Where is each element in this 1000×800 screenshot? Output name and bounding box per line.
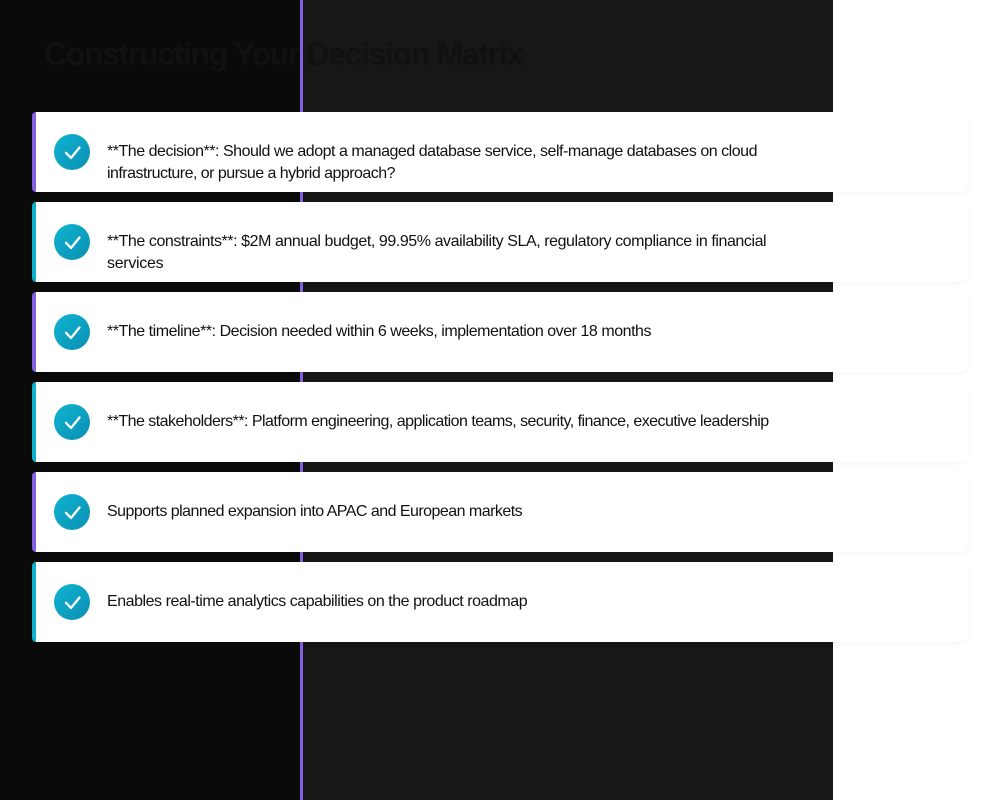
text: the timeline: **The timeline**: Decision needed within 6 weeks, implementation over 18 months (107, 323, 651, 340)
icon: check (54, 224, 90, 260)
list card: expansion (32, 472, 968, 552)
title: Constructing Your Decision Matrix (44, 36, 523, 72)
background: right dark panel (303, 0, 833, 800)
list card: analytics (32, 562, 968, 642)
text: the constraints: services (107, 255, 163, 272)
text: expansion: Supports planned expansion into APAC and European markets (107, 503, 522, 520)
icon: check (54, 494, 90, 530)
icon: check (54, 314, 90, 350)
text: the constraints (107, 233, 766, 272)
background: left dark panel (0, 0, 300, 800)
list card: the decision (32, 112, 968, 192)
list card: the constraints (32, 202, 968, 282)
background: purple vertical line (300, 0, 303, 800)
icon: check (54, 584, 90, 620)
list card: the timeline (32, 292, 968, 372)
text: the stakeholders: **The stakeholders**: Platform engineering, application teams, security, finance, executive leadership (107, 413, 769, 430)
text: the decision: **The decision**: Should we adopt a managed database service, self-manage databases on cloud (107, 143, 757, 160)
icon: check (54, 404, 90, 440)
list card: the stakeholders (32, 382, 968, 462)
text: analytics: Enables real-time analytics capabilities on the product roadmap (107, 593, 527, 610)
icon: check (54, 134, 90, 170)
text: the constraints: **The constraints**: $2M annual budget, 99.95% availability SLA, regulatory compliance in financial (107, 233, 766, 250)
text: the decision (107, 143, 757, 182)
text: the decision: infrastructure, or pursue a hybrid approach? (107, 165, 395, 182)
